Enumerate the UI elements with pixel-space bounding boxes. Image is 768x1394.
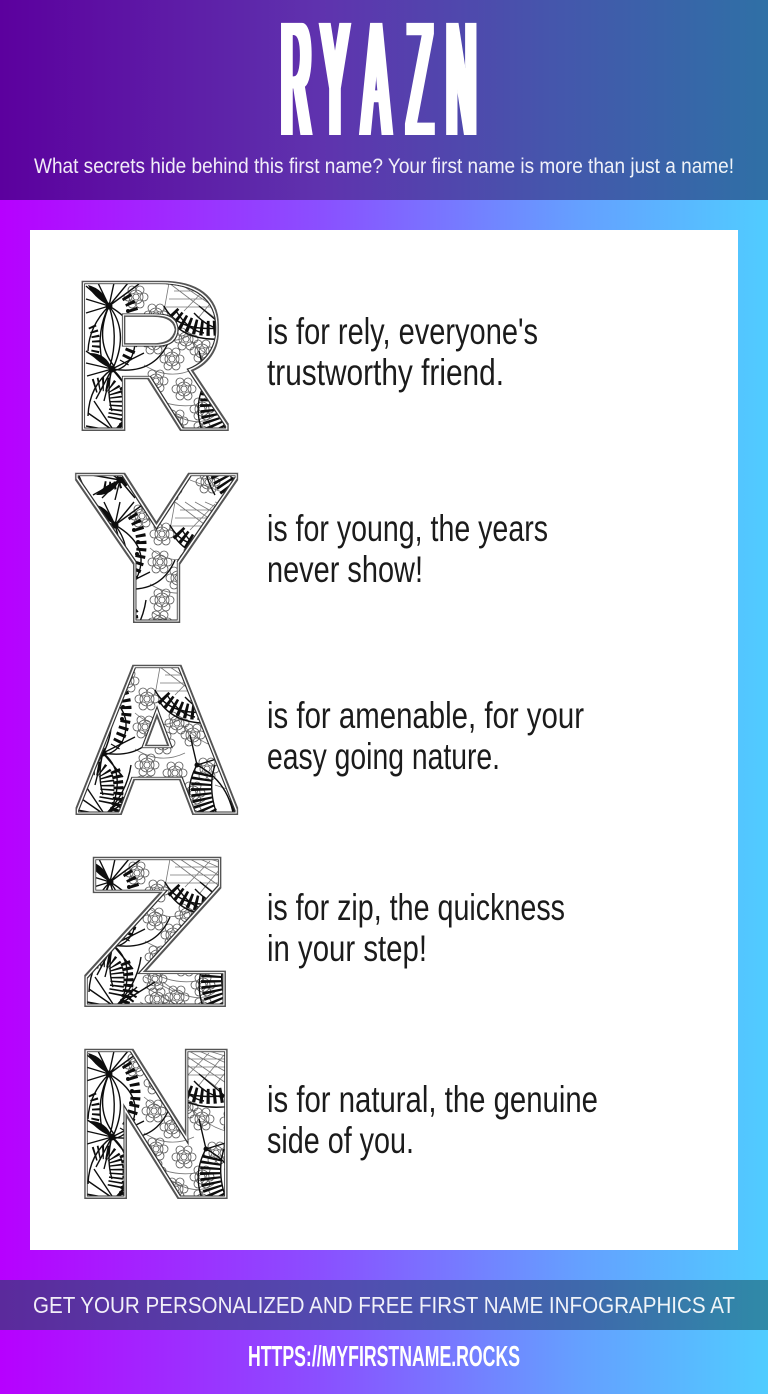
row Z [85,821,565,1042]
row N [77,1013,598,1234]
text: Y line: never show! [267,549,423,590]
icon: decorated letter Y: Y [82,437,232,658]
text: A line: easy going nature. [267,736,500,777]
text: R line: trustworthy friend. [267,352,504,393]
icon: decorated letter A: A [79,629,235,850]
text: N line: side of you. [267,1120,414,1161]
text: Y line: is for young, the years [267,508,548,549]
text: Z line: in your step! [267,928,427,969]
text: R line [267,311,538,393]
icon: decorated letter Z: Z [85,821,225,1042]
row R [75,245,538,466]
icon: decorated letter N: N [77,1013,235,1234]
text: Z line: is for zip, the quickness [267,887,565,928]
row Y [82,437,548,658]
text: A line [267,695,584,777]
text: N line [267,1079,598,1161]
text: A line: is for amenable, for your [267,695,584,736]
footer call-to-action band [0,1280,768,1330]
text: N line: is for natural, the genuine [267,1079,598,1120]
text: Y line [267,508,548,590]
text: Z line [267,887,565,969]
panel: acrostic card [30,230,738,1250]
row A [79,629,584,850]
text: R line: is for rely, everyone's [267,311,538,352]
header band [0,0,768,200]
footer url: HTTPS://MYFIRSTNAME.ROCKS [248,1341,520,1373]
icon: decorated letter R: R [75,245,223,466]
